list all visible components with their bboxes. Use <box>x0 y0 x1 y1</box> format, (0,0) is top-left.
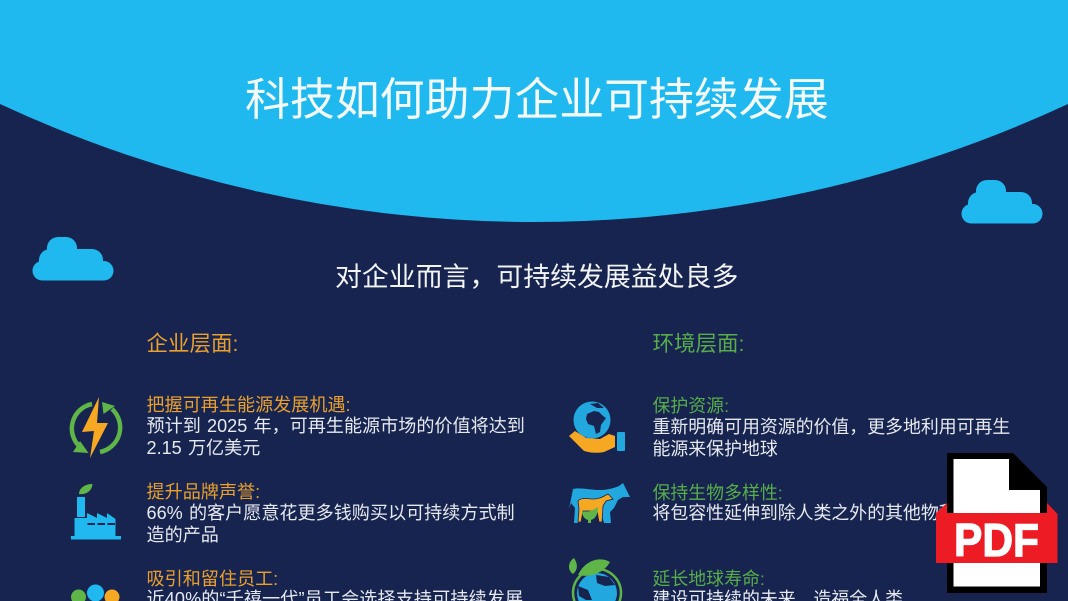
heading: environment level: 环境层面: <box>652 332 744 356</box>
text: resources detail: 重新明确可用资源的价值，更多地利用可再生 能源来保护地球 <box>652 417 1010 458</box>
item: retain staff: 吸引和留住员工: <box>146 569 278 589</box>
heading: business level: 企业层面: <box>146 332 238 356</box>
subtitle: 对企业而言，可持续发展益处良多 <box>335 262 738 292</box>
item: protect resources: 保护资源: <box>652 396 729 416</box>
item: renewable opportunity: 把握可再生能源发展机遇: <box>146 395 351 415</box>
item: brand reputation: 提升品牌声誉: <box>146 482 260 502</box>
item: extend life: 延长地球寿命: <box>652 569 765 589</box>
text: brand detail: 66% 的客户愿意花更多钱购买以可持续方式制 造的产品 <box>146 503 515 544</box>
item: biodiversity: 保持生物多样性: <box>652 483 783 503</box>
text: biodiversity detail: 将包容性延伸到除人类之外的其他物种 <box>652 503 957 523</box>
text: renewable detail: 预计到 2025 年，可再生能源市场的价值将达到 2.15 万亿美元 <box>146 416 525 458</box>
icon: PDF badge: PDF <box>954 514 1039 566</box>
title: 科技如何助力企业可持续发展 <box>245 74 829 125</box>
